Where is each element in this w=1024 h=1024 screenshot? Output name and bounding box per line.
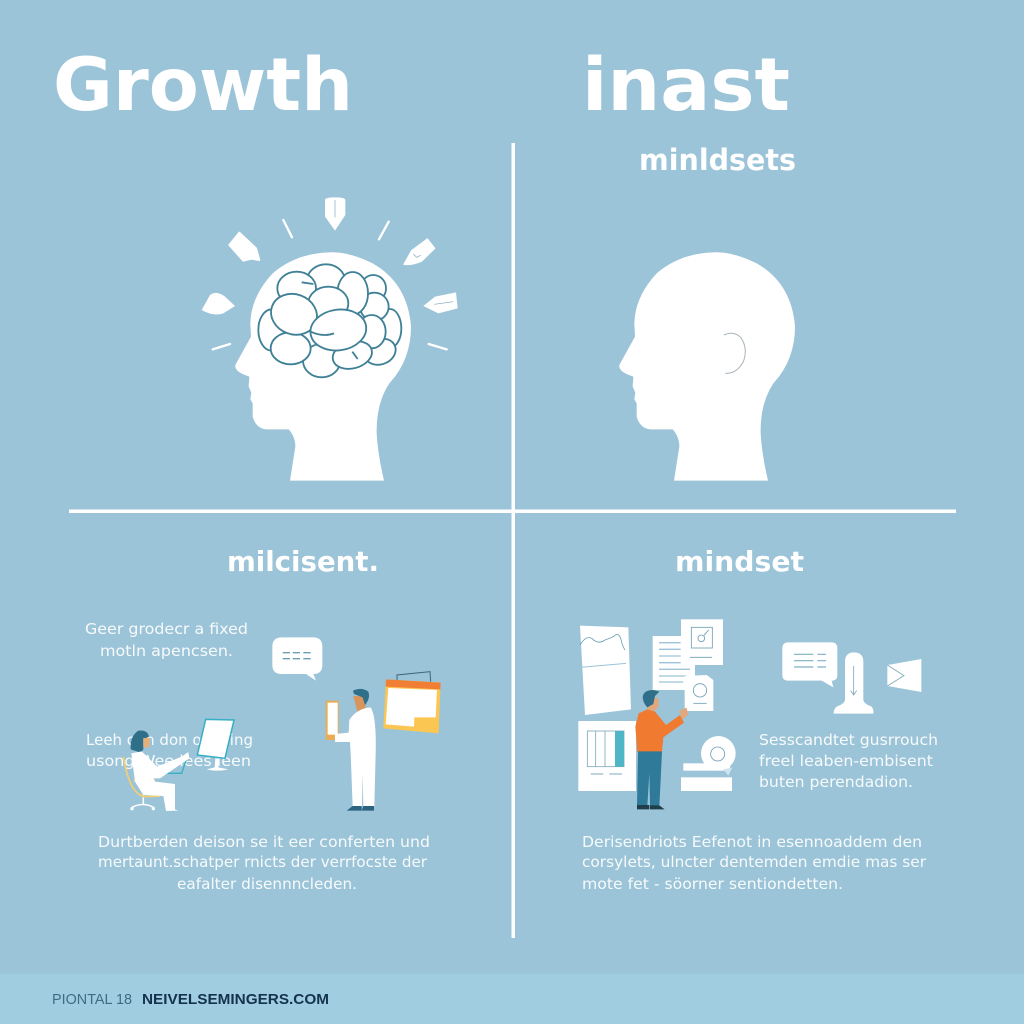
text block: right side: freel leaben-embisent (759, 752, 933, 770)
text block: behind seated figure: Leeh oan don opening (86, 731, 253, 749)
idea icons around head (202, 197, 458, 349)
text block: bottom right (582, 833, 927, 893)
text block: bottom left: mertaunt.schatper rnicts der verrfocste der (98, 853, 428, 871)
text block: top left (85, 620, 248, 660)
text block: behind seated figure (86, 731, 253, 770)
title: Growth: Growth (53, 43, 353, 128)
text block: top left: motln apencsen. (100, 642, 233, 660)
footer text: PIONTAL 18 (52, 991, 132, 1008)
footer text: NEIVELSEMINGERS.COM (142, 991, 329, 1008)
footer text (52, 991, 329, 1008)
growth head silhouette (235, 252, 411, 481)
illustration: standing man with tablet (326, 689, 376, 811)
text block: bottom right: corsylets, ulncter dentemden emdie mas ser (582, 853, 927, 871)
illustration: documents and charts (578, 619, 723, 791)
text block: bottom left: eafalter disennncleden. (177, 875, 357, 893)
text block: right side: buten perendadion. (759, 773, 913, 791)
illustration: tape dispenser (681, 736, 736, 791)
illustration: wall calendar (383, 672, 441, 733)
heading: minldsets: minldsets (639, 143, 796, 177)
illustration: man in orange sweater (635, 690, 688, 809)
illustration: pill device with arrow (834, 652, 873, 714)
text block: top left: Geer grodecr a fixed (85, 620, 248, 638)
text block: bottom right: mote fet - söorner sentiondetten. (582, 875, 843, 893)
text block: right side (759, 731, 938, 791)
illustration: left panel bubble (272, 637, 322, 681)
text block: bottom left (98, 833, 430, 893)
heading: milcisent: milcisent. (227, 545, 379, 578)
title: inast: inast (582, 43, 790, 128)
text block: bottom left: Durtberden deison se it eer conferten und (98, 833, 430, 851)
fixed head silhouette (619, 252, 795, 481)
illustration: megaphone shape (887, 659, 921, 692)
illustration: speech bubble with lines (782, 642, 837, 687)
text block: right side: Sesscandtet gusrrouch (759, 731, 938, 749)
heading: mindset: mindset (675, 545, 804, 578)
illustration: seated woman at desk (123, 730, 189, 811)
text block: behind seated figure: usong Wee lees leen (86, 752, 251, 770)
text block: bottom right: Derisendriots Eefenot in esennoaddem den (582, 833, 922, 851)
brain (258, 264, 401, 377)
illustration: monitor (197, 719, 234, 771)
